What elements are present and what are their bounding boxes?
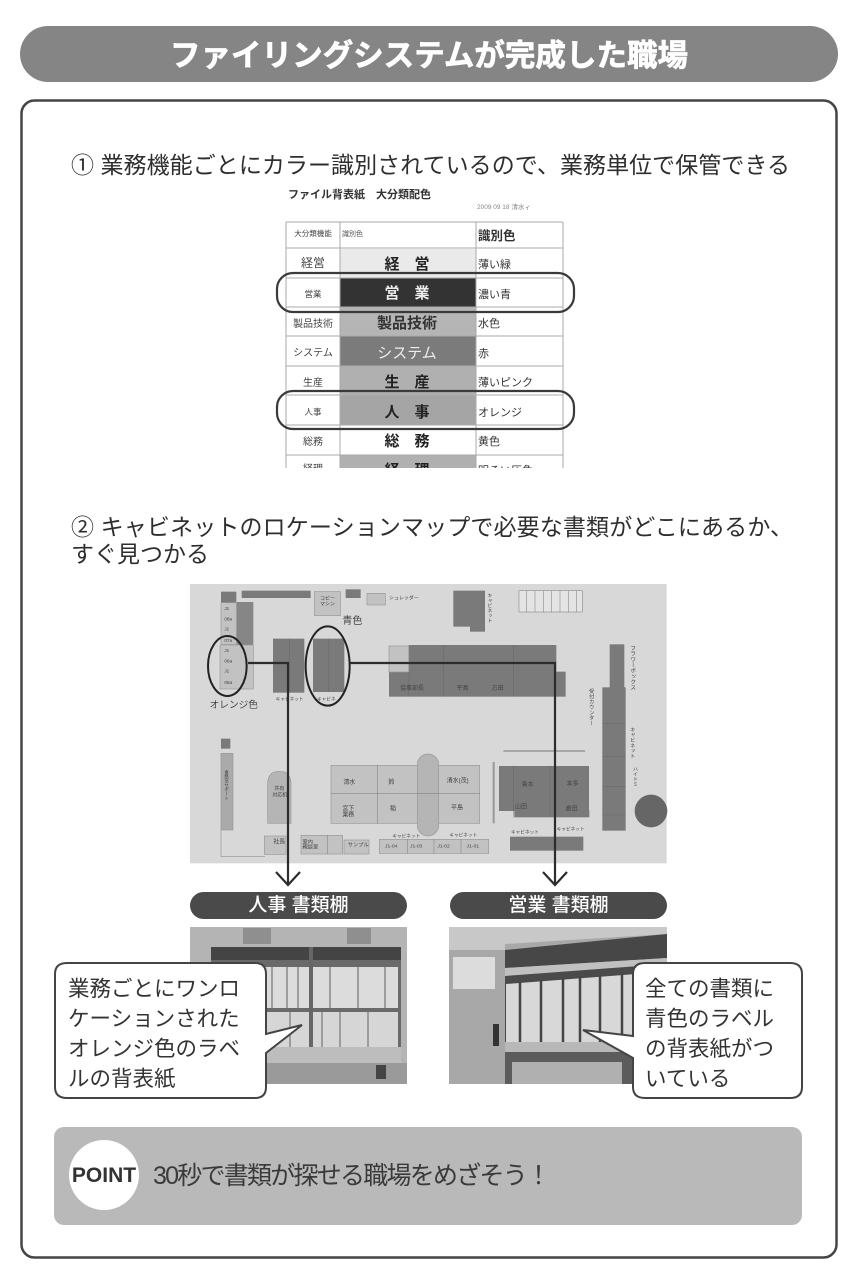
- title banner: ファイリングシステムが完成した職場: [170, 38, 688, 73]
- location map: 山田: [515, 803, 527, 811]
- heading 2: ② キャビネットのロケーションマップで必要な書類がどこにあるか、: [71, 514, 793, 540]
- location map: J1: [224, 648, 230, 653]
- location map: 宮下: [342, 805, 354, 813]
- color table: 製品技術: [293, 317, 333, 330]
- location map: ハイトミ: [632, 767, 638, 787]
- photo: 人事 shelf: [190, 927, 407, 1084]
- location map: キャビネット: [629, 727, 635, 759]
- map label: オレンジ色: オレンジ色: [210, 699, 258, 711]
- map label: 青色: 青色: [342, 614, 362, 627]
- arrow: to 人事 shelf: [248, 663, 300, 885]
- arrow: to 営業 shelf: [350, 663, 567, 885]
- location map: J1: [224, 627, 230, 632]
- color table: 営 業: [384, 284, 430, 302]
- color table: システム: [293, 347, 333, 359]
- color table: オレンジ: [478, 406, 522, 419]
- color table: 生産: [303, 376, 323, 389]
- location map: 業務: [342, 811, 354, 819]
- color table: 営業: [304, 289, 322, 299]
- location map: 平島: [457, 684, 469, 692]
- color table: 水色: [478, 317, 500, 330]
- callout: 営業: [583, 963, 802, 1098]
- callout: 営業: 全ての書類に: [645, 977, 774, 1001]
- location map: 協事部長: [400, 684, 424, 692]
- color table: 黄色: [478, 434, 500, 448]
- highlight oval: 営業: [277, 273, 574, 312]
- location map: 08a: [224, 617, 233, 622]
- location map: 05a: [224, 680, 233, 685]
- table title: ファイル背表紙 大分類配色: [288, 187, 431, 201]
- title banner: [20, 26, 838, 82]
- callout: 人事: [55, 963, 302, 1098]
- location map: コピー: [320, 596, 335, 602]
- color table: 経営: [301, 256, 325, 270]
- heading 2: すぐ見つかる: [71, 541, 209, 567]
- label: 人事 書類棚: 人事 書類棚: [248, 894, 349, 916]
- color table: 赤: [478, 347, 489, 360]
- color table: 経 理: [384, 462, 430, 479]
- location map: 共有: [274, 785, 284, 792]
- color table: 薄いピンク: [478, 375, 533, 389]
- point badge: [69, 1140, 139, 1210]
- color table: 製品技術: [377, 314, 437, 332]
- location map: キャビネット: [511, 828, 539, 835]
- color table: 生 産: [384, 373, 430, 391]
- location map: 親談室: [302, 843, 319, 851]
- highlight oval: 人事: [277, 391, 574, 429]
- location map: シュレッダー: [389, 594, 419, 601]
- heading 1: ① 業務機能ごとにカラー識別されているので、業務単位で保管できる: [71, 152, 790, 178]
- color table: 人 事: [384, 403, 430, 421]
- location map: J1-03: [410, 843, 423, 849]
- location map: J1: [224, 606, 230, 611]
- location map: キャビネ: [317, 696, 336, 703]
- color table: 経 営: [384, 255, 430, 273]
- color table: [277, 187, 574, 479]
- callout: 営業: 青色のラベル: [645, 1007, 774, 1031]
- callout: 人事: ルの背表紙: [68, 1067, 176, 1091]
- color table: 識別色: [478, 228, 516, 243]
- location map: 倉田: [566, 806, 578, 813]
- location map: 青木: [522, 781, 534, 789]
- color table: 総 務: [384, 433, 430, 450]
- callout: 人事: 業務ごとにワンロ: [68, 977, 240, 1001]
- color table: 識別色: [342, 229, 363, 238]
- location map: 社長: [273, 837, 285, 845]
- color table: 経理: [303, 462, 323, 475]
- location map: J1-01: [467, 843, 479, 849]
- location map: 受付カウンター: [588, 687, 594, 726]
- location map: サンプル: [348, 842, 369, 849]
- location map: 本多: [567, 780, 579, 788]
- location map: フラワーボックス: [629, 645, 635, 691]
- location map: キャビネット: [449, 832, 477, 839]
- photo: 営業 shelf: [449, 927, 667, 1084]
- location map: 07a: [224, 638, 233, 643]
- location map: 清水: [343, 778, 355, 786]
- location map: 室内: [302, 837, 313, 845]
- location map: 平島: [451, 803, 463, 811]
- point box: [54, 1127, 802, 1225]
- location map: 06a: [224, 659, 233, 664]
- color table: 大分類機能: [294, 228, 332, 238]
- callout: 人事: ケーションされた: [68, 1007, 240, 1031]
- callout: 営業: いている: [645, 1067, 730, 1091]
- location map: 対応机: [272, 792, 287, 799]
- location map: 方田: [492, 684, 504, 692]
- point badge: POINT: [72, 1164, 136, 1187]
- location map: キャビネット: [557, 826, 585, 833]
- label: 営業 書類棚: 営業 書類棚: [508, 894, 609, 916]
- color table: 薄い緑: [478, 257, 511, 271]
- location map: マシン: [320, 601, 335, 607]
- location map: J1-02: [437, 843, 450, 849]
- color table: 総務: [303, 435, 323, 448]
- color table: システム: [377, 345, 437, 362]
- callout: 人事: オレンジ色のラベ: [68, 1037, 240, 1061]
- map circle: オレンジ: [208, 636, 247, 696]
- map circle: 青色: [306, 626, 350, 706]
- location map: 鈴: [388, 778, 394, 786]
- location map: キャビネット: [276, 696, 304, 703]
- color table: 人事: [304, 407, 322, 417]
- location map: 稲: [390, 805, 396, 813]
- point message: 30秒で書類が探せる職場をめざそう！: [153, 1161, 551, 1190]
- color table: 濃い青: [478, 287, 511, 301]
- color table: 明るい灰色: [478, 464, 533, 477]
- callout: 営業: の背表紙がつ: [645, 1037, 774, 1061]
- location map: キャビネット: [392, 832, 420, 839]
- location map: J1: [224, 669, 230, 674]
- table date: 2009 09 18 清水ィ: [477, 202, 531, 211]
- location map: [190, 584, 667, 863]
- location map: 清水(茂): [447, 776, 469, 784]
- location map: キャビネット: [486, 593, 492, 624]
- label: 営業 書類棚: [450, 892, 667, 919]
- location map: J1-04: [385, 843, 398, 849]
- location map: 事務室サポート: [224, 769, 229, 801]
- label: 人事 書類棚: [190, 892, 407, 919]
